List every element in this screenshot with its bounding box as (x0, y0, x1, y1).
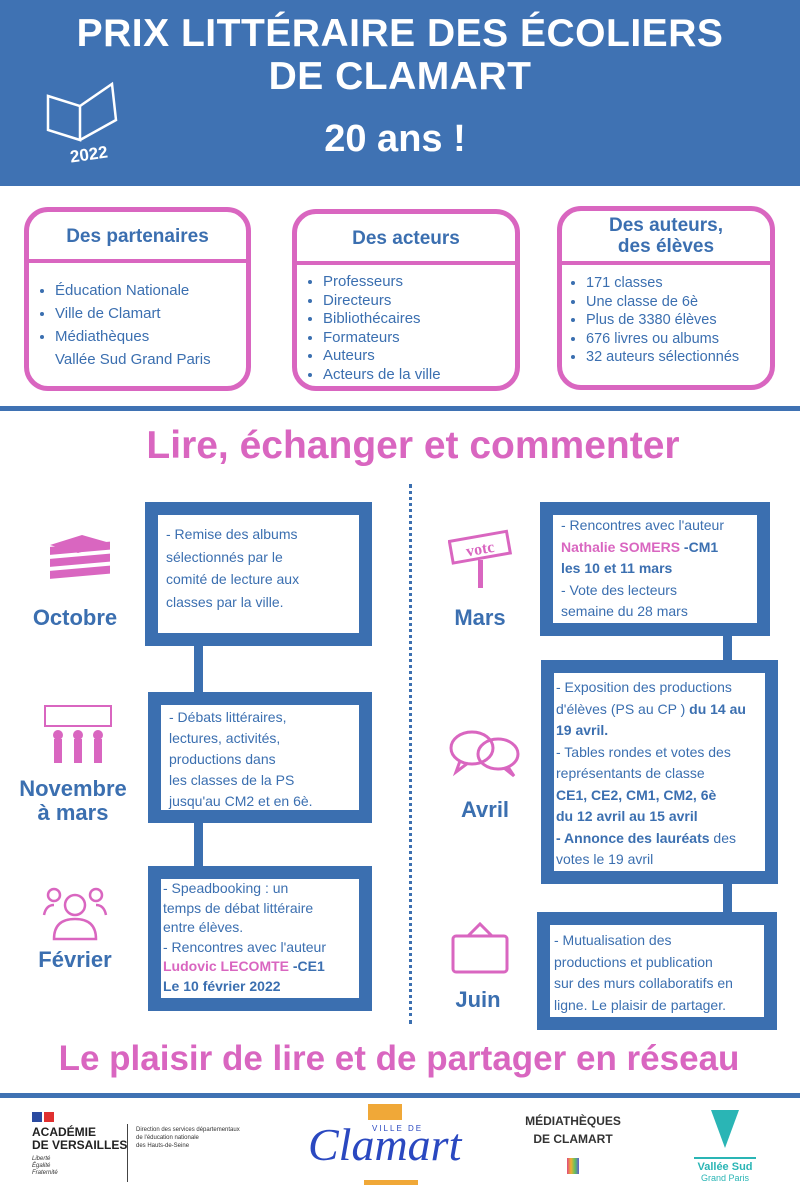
panel: partenaires: Des partenaires (66, 226, 209, 247)
logo: académie: Direction des services départementaux (136, 1127, 240, 1133)
month: novembre: Novembre (19, 776, 127, 801)
box: juin: productions et publication (554, 954, 713, 970)
icon: open book (46, 82, 118, 142)
panel: acteurs: Formateurs (323, 328, 400, 346)
logo: vallée sud (694, 1110, 756, 1183)
panel: acteurs: Directeurs (323, 292, 391, 308)
logo: académie (32, 1112, 240, 1182)
logo: académie: Égalité (32, 1163, 50, 1169)
panel: partenaires: Ville de Clamart (55, 305, 161, 322)
logo: académie: Fraternité (32, 1170, 58, 1176)
panel: acteurs: Acteurs de la ville (323, 366, 441, 382)
box: février: Le 10 février 2022 (163, 978, 281, 994)
logo: clamart: VILLE DE (372, 1124, 423, 1133)
panel: auteurs élèves: Une classe de 6è (586, 294, 698, 310)
year: 2022 (69, 142, 109, 167)
month: novembre (19, 776, 127, 825)
box: mars: - Rencontres avec l'auteur (561, 517, 724, 533)
box: novembre: les classes de la PS (169, 772, 294, 788)
box: octobre: classes par la ville. (166, 594, 284, 610)
title: DE CLAMART (269, 55, 531, 98)
panel: partenaires: Éducation Nationale (55, 282, 189, 299)
logo: vallée sud: Vallée Sud (697, 1161, 753, 1173)
icon: books (50, 535, 110, 579)
panel: partenaires: Médiathèques (55, 328, 149, 345)
panel: acteurs: Professeurs (323, 273, 403, 290)
panel: auteurs élèves: des élèves (618, 236, 714, 257)
panel: partenaires: Vallée Sud Grand Paris (55, 351, 211, 368)
box: mars: les 10 et 11 mars (561, 560, 672, 576)
box: avril: du 12 avril au 15 avril (556, 808, 698, 824)
box: novembre: jusqu'au CM2 et en 6è. (169, 793, 313, 809)
box: novembre (148, 692, 372, 823)
icon: protest sign (44, 705, 112, 763)
month: mars: Mars (454, 605, 506, 630)
box: mars (540, 502, 770, 636)
logo: clamart (308, 1104, 462, 1185)
box: avril: 19 avril. (556, 722, 608, 738)
panel: acteurs: Des acteurs (352, 228, 460, 249)
icon: vote sign (448, 530, 512, 588)
panel: acteurs: Auteurs (323, 347, 375, 364)
panel: auteurs élèves: 171 classes (586, 275, 663, 291)
panel: auteurs élèves: 32 auteurs sélectionnés (586, 349, 739, 365)
box: avril (541, 660, 778, 884)
box: novembre: productions dans (169, 751, 276, 767)
box: novembre: - Débats littéraires, (169, 709, 286, 725)
box: juin: - Mutualisation des (554, 932, 672, 948)
box: octobre: sélectionnés par le (166, 548, 283, 564)
box: février: - Speadbooking : un (163, 880, 288, 896)
title (77, 12, 723, 98)
panel: auteurs élèves: Des auteurs, (609, 215, 723, 236)
month: avril: Avril (461, 797, 509, 822)
icon: people (42, 888, 108, 940)
box: avril: - Exposition des productions (556, 679, 732, 695)
panel: auteurs élèves: Plus de 3380 élèves (586, 312, 717, 328)
box: mars: - Vote des lecteurs (561, 582, 677, 598)
panel: acteurs (292, 209, 520, 391)
heading: lire échanger: Lire, échanger et commenter (146, 424, 680, 467)
box: octobre: - Remise des albums (166, 526, 298, 542)
box: avril: représentants de classe (556, 765, 705, 781)
panel: auteurs élèves: 676 livres ou albums (586, 330, 719, 346)
logo: clamart: Clamart (308, 1119, 461, 1170)
box: octobre: comité de lecture aux (166, 571, 299, 587)
box: novembre: lectures, activités, (169, 730, 280, 746)
month: octobre: Octobre (33, 605, 117, 630)
logo: académie: de l'éducation nationale (136, 1135, 199, 1141)
panel: auteurs élèves (557, 206, 775, 390)
logo: académie: Liberté (32, 1156, 50, 1162)
title: PRIX LITTÉRAIRE DES ÉCOLIERS (77, 12, 723, 55)
icon: vote sign: votc (465, 539, 496, 560)
box: juin (537, 912, 777, 1030)
month: novembre: à mars (38, 800, 108, 825)
box: avril: - Tables rondes et votes des (556, 744, 731, 760)
box: mars: Nathalie SOMERS -CM1 (561, 538, 718, 554)
logo: médiathèques (525, 1114, 621, 1174)
box: octobre (145, 502, 372, 646)
logo: académie: ACADÉMIE (32, 1125, 96, 1139)
icon: speech bubbles (450, 730, 520, 778)
logo: médiathèques: DE CLAMART (533, 1132, 613, 1146)
logo: vallée sud: Grand Paris (701, 1173, 749, 1183)
box: février: - Rencontres avec l'auteur (163, 938, 326, 954)
box: février (148, 866, 372, 1011)
panel: acteurs: Bibliothécaires (323, 310, 421, 327)
panel: partenaires (24, 207, 251, 391)
icon: frame (452, 922, 508, 974)
month: juin: Juin (455, 987, 501, 1012)
month: février: Février (38, 947, 112, 972)
heading: plaisir: Le plaisir de lire et de partager en réseau (59, 1039, 739, 1078)
box: mars: semaine du 28 mars (561, 603, 688, 619)
box: février: temps de débat littéraire (163, 900, 313, 916)
logo: académie: des Hauts-de-Seine (136, 1143, 189, 1149)
header band (0, 0, 800, 186)
logo: médiathèques: MÉDIATHÈQUES (525, 1114, 621, 1128)
logos footer (32, 1104, 756, 1185)
box: juin: sur des murs collaboratifs en (554, 975, 733, 991)
box: juin: ligne. Le plaisir de partager. (554, 996, 726, 1012)
subtitle: 20 ans ! (324, 118, 466, 160)
box: avril: d'élèves (PS au CP ) du 14 au (556, 700, 746, 716)
box: février: entre élèves. (163, 919, 243, 935)
box: avril: - Annonce des lauréats des (556, 830, 736, 846)
logo: académie: DE VERSAILLES (32, 1138, 127, 1152)
box: avril: votes le 19 avril (556, 851, 653, 867)
box: avril: CE1, CE2, CM1, CM2, 6è (556, 786, 716, 802)
box: février: Ludovic LECOMTE -CE1 (163, 958, 325, 974)
